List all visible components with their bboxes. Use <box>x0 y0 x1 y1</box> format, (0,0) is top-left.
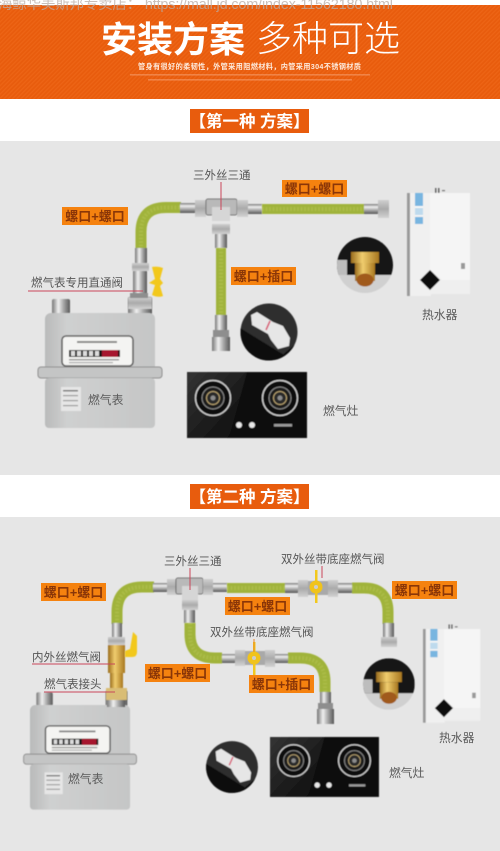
pipe and brass valve: meter to tee, scheme two <box>106 579 177 707</box>
label: water heater: 热水器 <box>439 731 475 745</box>
label: gas stove: 燃气灶 <box>323 404 359 418</box>
callout: meter joint label: 燃气表接头 <box>44 677 102 691</box>
heading: scheme one: 【第一种 方案】 <box>189 111 310 131</box>
pipe: tee to stove with valve, scheme two <box>190 623 334 724</box>
tag: lower left pipe, scheme two: 螺口+螺口 <box>148 666 207 681</box>
callout: tee label, scheme one: 三外丝三通 <box>193 169 251 182</box>
panel: header banner <box>0 5 500 99</box>
icon: plug connector, scheme two <box>206 741 258 794</box>
heading: scheme two: 【第二种 方案】 <box>189 486 310 506</box>
gas stove, scheme two <box>270 737 379 797</box>
tag: left pipe, scheme one: 螺口+螺口 <box>65 209 125 224</box>
callout: upper base valve label: 双外丝带底座燃气阀 <box>281 552 384 566</box>
pipe: tee to water heater, scheme one <box>262 200 389 218</box>
label: gas meter: 燃气表 <box>88 393 124 407</box>
tee fitting, scheme one <box>206 199 262 248</box>
callout: brass valve label: 内外丝燃气阀 <box>32 650 101 664</box>
icon: plug connector, scheme one <box>240 303 298 362</box>
pipe: tee to stove, scheme one <box>212 248 230 351</box>
tag: middle pipe, scheme two: 螺口+螺口 <box>228 599 287 614</box>
pipe: tee to water heater with valve, scheme two <box>227 580 397 647</box>
callout: tee label, scheme two <box>164 555 222 590</box>
title: 安装方案 <box>101 19 245 60</box>
label: gas meter: 燃气表 <box>68 772 104 786</box>
valve handle: upper base valve, scheme two <box>310 570 322 603</box>
water heater, scheme two <box>423 624 480 723</box>
panel: scheme one <box>0 141 500 475</box>
callout: tee label, scheme one <box>193 169 251 210</box>
callout: meter joint label <box>44 677 115 692</box>
callout: valve label, scheme one: 燃气表专用直通阀 <box>31 276 123 290</box>
gas meter, scheme one <box>38 297 162 428</box>
icon: brass connector, scheme one <box>337 237 393 293</box>
pipe: meter to tee, scheme one <box>128 200 206 309</box>
gas meter, scheme two <box>24 690 136 810</box>
tag: left pipe, scheme two: 螺口+螺口 <box>44 585 103 600</box>
icon: brass connector, scheme two <box>363 658 415 710</box>
callout: lower base valve label: 双外丝带底座燃气阀 <box>210 625 314 639</box>
valve handle: lower base valve, scheme two <box>248 642 260 675</box>
title <box>101 18 400 60</box>
tee fitting, scheme two <box>176 578 227 623</box>
title: 多种可选 <box>256 18 400 59</box>
tag: right pipe, scheme one: 螺口+螺口 <box>285 182 344 196</box>
callout: lower base valve label <box>210 625 314 652</box>
gas stove, scheme one <box>187 372 307 438</box>
panel: scheme two <box>0 517 500 851</box>
valve handle, scheme one <box>149 267 163 297</box>
callout: valve label, scheme one <box>28 276 143 291</box>
label: gas stove: 燃气灶 <box>389 766 425 780</box>
callout: tee label, scheme two: 三外丝三通 <box>164 555 222 568</box>
tag: lower right pipe, scheme two: 螺口+插口 <box>252 677 311 692</box>
water heater, scheme one <box>407 188 470 296</box>
valve handle, scheme two <box>125 632 137 657</box>
tag: stove pipe, scheme one: 螺口+插口 <box>234 269 293 284</box>
callout: upper base valve label <box>281 552 384 578</box>
tag: right pipe, scheme two: 螺口+螺口 <box>395 583 454 598</box>
label: water heater: 热水器 <box>422 308 458 322</box>
subtitle: 管身有很好的柔韧性，外管采用阻燃材料，内管采用304不锈钢材质 <box>138 62 361 71</box>
